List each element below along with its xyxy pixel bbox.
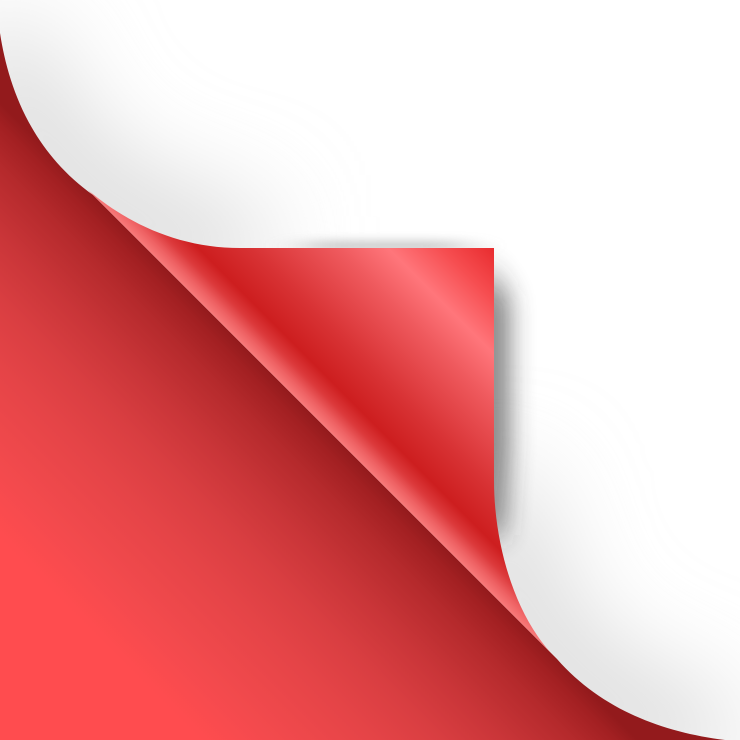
cast shadow: above flap [305,242,465,250]
curled red flap [88,190,557,659]
cast shadow: right of flap [480,262,506,535]
